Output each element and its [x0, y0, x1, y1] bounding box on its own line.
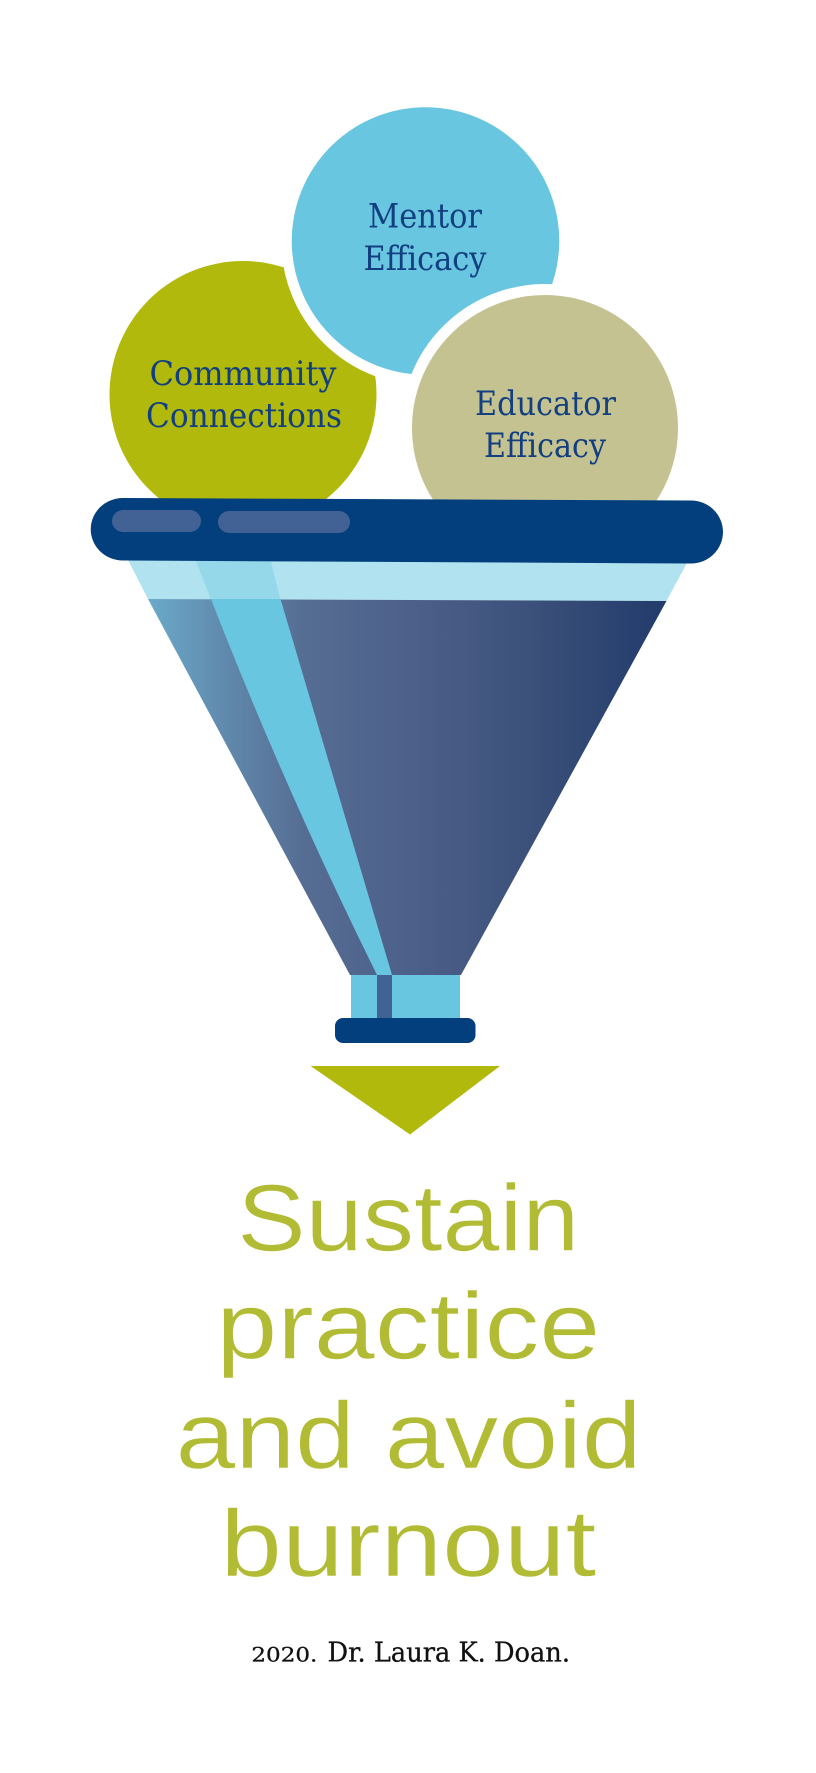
funnel top bar: [91, 498, 723, 564]
label: Educator Efficacy: Efficacy: [484, 426, 606, 465]
funnel rim overlap strip: [195, 558, 280, 600]
credit line: Dr. Laura K. Doan.: [328, 1638, 570, 1669]
label: Community Connections: Connections: [146, 396, 342, 435]
label: Mentor Efficacy: Mentor: [368, 196, 483, 236]
arrow: down: [311, 1066, 500, 1134]
funnel neck: [351, 975, 460, 1019]
heading: Sustain practice and avoid burnout: practice: [216, 1274, 600, 1380]
heading: Sustain practice and avoid burnout: burnout: [220, 1491, 596, 1597]
bar highlight left: [112, 510, 201, 532]
heading: Sustain practice and avoid burnout: Sustain: [237, 1166, 579, 1272]
heading: Sustain practice and avoid burnout: and avoid: [176, 1383, 642, 1489]
funnel light rim band: [127, 558, 688, 601]
bar highlight right: [218, 511, 350, 533]
funnel neck dark stripe: [377, 975, 392, 1019]
funnel body: [148, 599, 666, 975]
circle: Community Connections: [110, 261, 376, 528]
label: Educator Efficacy: Educator: [475, 384, 617, 423]
funnel base: [335, 1018, 476, 1043]
credit line: 2020.: [251, 1643, 317, 1667]
circle: Mentor Efficacy: [286, 102, 564, 380]
funnel blue stream: [211, 599, 392, 975]
funnel: [91, 498, 723, 1043]
label: Community Connections: Community: [150, 354, 337, 393]
label: Mentor Efficacy: Efficacy: [364, 239, 487, 278]
circle: Educator Efficacy: [406, 290, 684, 566]
